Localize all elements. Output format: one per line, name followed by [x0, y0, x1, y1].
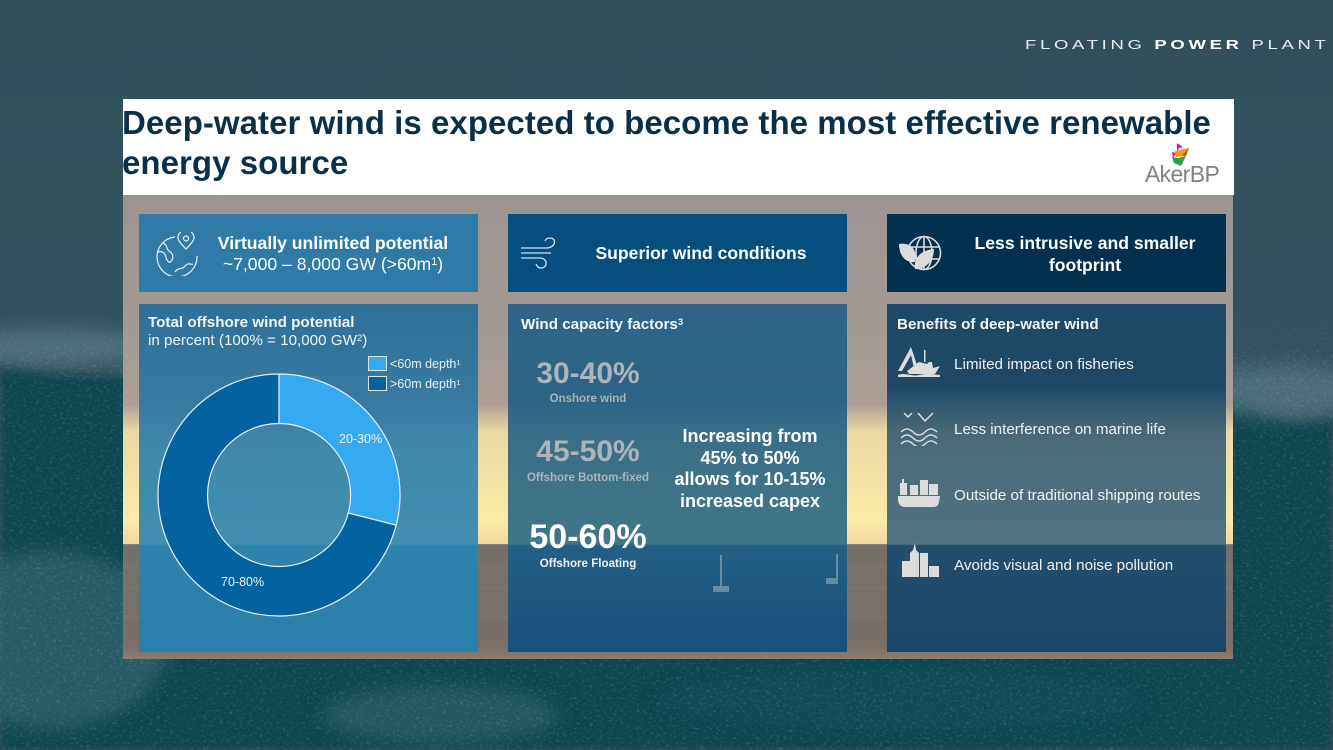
- header text: Superior wind conditions: [595, 243, 807, 263]
- AkerBP wordmark: AkerBP: [1145, 161, 1219, 187]
- header text: [218, 233, 448, 274]
- stat: bottom-fixed: 45-50%: [536, 435, 640, 468]
- legend: under 60m: <60m depth1: [390, 357, 461, 371]
- segment: under 60m: [279, 374, 400, 525]
- panel heading: Wind capacity factors3: [521, 316, 683, 333]
- callout: [674, 426, 826, 511]
- legend: over 60m: >60m depth1: [390, 377, 461, 391]
- logo: AkerBP: [1145, 143, 1219, 187]
- wind turbines at sea: [713, 554, 838, 592]
- panel: benefits: [887, 304, 1226, 652]
- panel heading: [148, 314, 367, 349]
- callout: 45% to 50%: [700, 448, 800, 468]
- icon: wind: [521, 237, 556, 269]
- benefit text: Less interference on marine life: [954, 421, 1166, 438]
- stat: onshore: [536, 357, 640, 405]
- icon: globe with pin: [156, 232, 198, 276]
- title: Deep-water wind is expected to become the most effective renewable energy source: [122, 104, 1211, 181]
- donut chart: [157, 373, 401, 617]
- benefit: fisheries: [898, 347, 1134, 377]
- header text: Virtually unlimited potential: [218, 233, 448, 253]
- label: 20-30%: 20-30%: [339, 432, 382, 446]
- panel heading: in percent (100% = 10,000 GW2): [148, 332, 367, 349]
- callout: Increasing from: [682, 426, 818, 446]
- label: 70-80%: 70-80%: [221, 575, 264, 589]
- icon: AkerBP flower: [1172, 143, 1189, 166]
- stat: bottom-fixed: [527, 435, 649, 484]
- stat: onshore: Onshore wind: [550, 393, 626, 405]
- benefit: pollution: [902, 543, 1173, 577]
- panel: wind header: [508, 214, 847, 292]
- benefit text: Limited impact on fisheries: [954, 356, 1134, 373]
- callout: allows for 10-15%: [674, 469, 826, 489]
- background: stormy sea: [0, 320, 1333, 750]
- benefit: shipping: [898, 479, 1201, 507]
- icon: container ship: [898, 479, 940, 507]
- logo: Floating Power Plant: FLOATING POWER PLANT: [1025, 38, 1330, 52]
- header text: ~7,000 – 8,000 GW (>60m1): [223, 254, 443, 274]
- legend: [368, 356, 461, 391]
- panel: potential header: [139, 214, 478, 292]
- icon: globe with leaves: [899, 236, 942, 270]
- stat: floating: 50-60%: [529, 518, 647, 556]
- segment: over 60m: [158, 374, 396, 616]
- icon: city: [902, 543, 939, 577]
- benefit: marine life: [900, 412, 1166, 446]
- benefit text: Outside of traditional shipping routes: [954, 487, 1201, 504]
- stat: bottom-fixed: Offshore Bottom-fixed: [527, 472, 649, 484]
- header text: Less intrusive and smaller footprint: [974, 233, 1196, 274]
- icon: birds over waves: [900, 412, 938, 446]
- panel: footprint header: [887, 214, 1226, 292]
- title band: [123, 99, 1234, 195]
- panel heading: Benefits of deep-water wind: [897, 316, 1099, 333]
- icon: fishing boat: [898, 347, 940, 377]
- stat: onshore: 30-40%: [536, 357, 640, 390]
- benefit text: Avoids visual and noise pollution: [954, 557, 1173, 574]
- panel heading: Total offshore wind potential: [148, 314, 354, 331]
- panel: total offshore wind potential: [139, 304, 478, 652]
- callout: increased capex: [680, 490, 820, 510]
- panel: wind capacity factors: [508, 304, 847, 652]
- slide backdrop photo: [123, 195, 1233, 659]
- stat: floating: Offshore Floating: [540, 557, 636, 570]
